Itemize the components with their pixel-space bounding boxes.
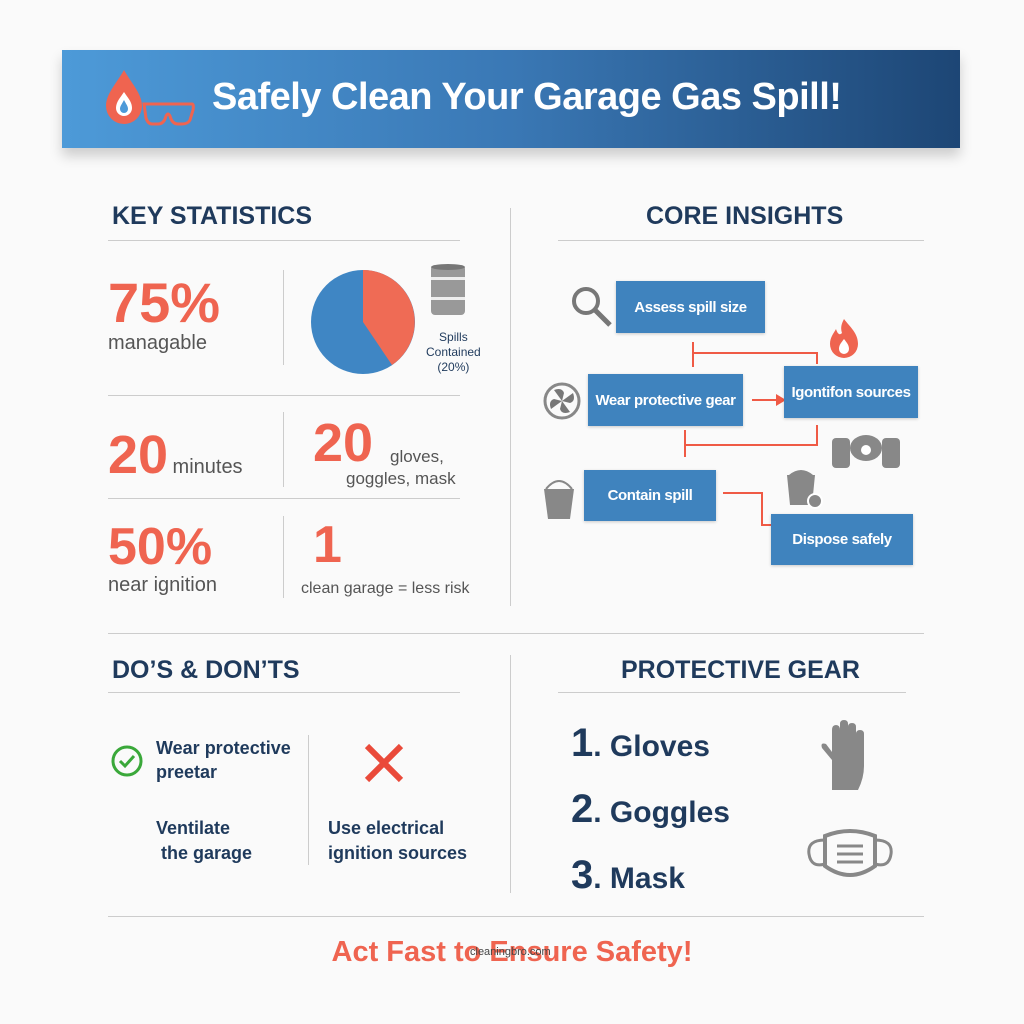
pie chart [311,270,415,374]
pie label: Spills [439,330,468,344]
box: contain: Contain spill [608,487,692,504]
stat 20 minutes: 20 minutes [108,425,243,485]
title: Safely Clean Your Garage Gas Spill! [212,76,841,118]
dont items: ignition sources [328,843,467,863]
box: wear gear [588,374,743,426]
do items: Wear protective [156,738,291,758]
watermark: cleaningbro.com [470,946,551,958]
stat 75%: managable [108,332,207,354]
footer callout: Act Fast to Ensure Safety! [332,936,692,968]
box: assess: Assess spill size [634,298,747,316]
box: wear gear: Wear protective gear [595,392,736,408]
icon: gas drop and goggles [106,70,195,126]
icon: cross [364,744,404,782]
icon: fan [544,382,580,420]
pie label: Contained [426,345,481,359]
box: dispose: Dispose safely [792,531,892,548]
heading: CORE INSIGHTS [646,202,843,230]
list: 2. Goggles [571,787,730,831]
panel: dos and donts: Ventilate [156,818,230,838]
icon: flame [830,319,858,358]
list: 3. Mask [571,853,685,897]
stat 1: 1 [313,516,342,574]
stat 1 [301,516,470,597]
connector arrows [684,342,818,526]
stat 1: clean garage = less risk [301,580,470,597]
pie label: (20%) [437,360,469,374]
box: dispose [771,514,913,565]
icon: magnifier [572,287,612,327]
icon: mask [807,829,893,877]
panel: key statistics: goggles, mask [346,469,456,488]
panel: dos and donts: the garage [161,843,252,863]
list [571,721,730,897]
box: ignition sources: Igontifon sources [791,384,911,400]
panel: key statistics [108,202,481,598]
icon: disposal bucket [787,470,821,507]
icon: check [112,746,142,776]
heading: KEY STATISTICS [112,202,312,230]
icon: bucket [544,480,574,519]
stat 50%: near ignition [108,574,217,596]
panel: protective gear [558,656,906,897]
icon: glove [822,720,864,790]
heading: PROTECTIVE GEAR [621,656,860,684]
stat 75%: 75% [108,271,220,334]
box: ignition sources [784,366,918,418]
icon: barrel [431,264,465,315]
list: 1. Gloves [571,721,710,765]
do items: preetar [156,762,217,782]
box: assess [616,281,765,333]
heading: DO’S & DON’TS [112,656,300,684]
panel: core insights [544,202,924,568]
header banner [62,50,960,148]
stat 50%: 50% [108,518,212,576]
icon: gloves and mask [832,435,900,468]
dont items: Use electrical [328,818,444,838]
panel: dos and donts [108,656,467,865]
do items [156,738,291,782]
stat 20 gear: 20 [313,413,373,473]
panel: key statistics: gloves, [390,447,444,466]
dont items [328,818,467,863]
box: contain [584,470,716,521]
pie label [426,330,481,374]
